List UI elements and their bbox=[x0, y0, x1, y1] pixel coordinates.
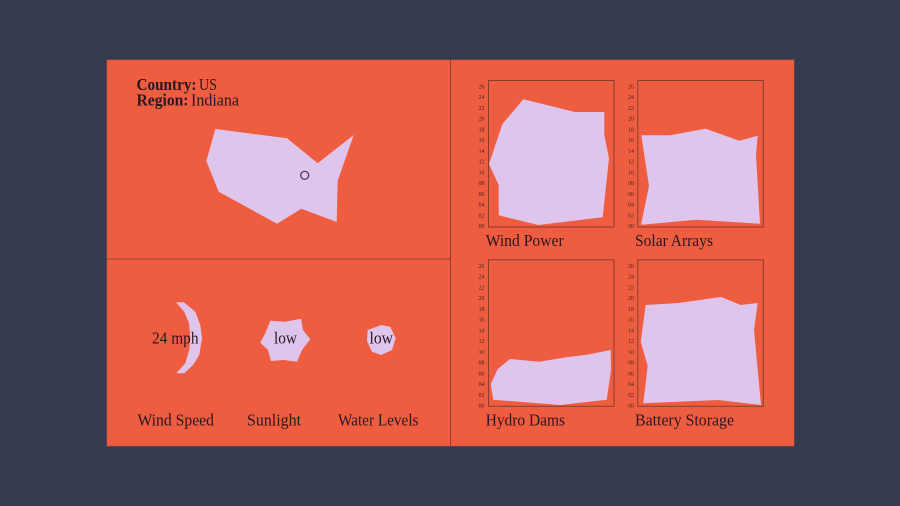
chart: battery storage: 02 bbox=[628, 393, 634, 399]
chart: battery storage: 24 bbox=[628, 274, 634, 280]
chart: solar arrays: 16 bbox=[628, 138, 634, 144]
chart: hydro dams: 22 bbox=[479, 285, 484, 291]
chart: solar arrays: 14 bbox=[628, 149, 634, 155]
metric: sunlight: Sunlight bbox=[247, 410, 301, 430]
chart: solar arrays bbox=[628, 80, 763, 250]
metric: water levels: low bbox=[370, 328, 394, 348]
chart: hydro dams: 26 bbox=[479, 264, 484, 270]
chart: wind power: 04 bbox=[479, 203, 484, 209]
chart: solar arrays: 12 bbox=[628, 160, 634, 166]
chart: wind power: 06 bbox=[479, 192, 484, 198]
chart: solar arrays: 20 bbox=[628, 117, 634, 123]
chart: hydro dams: 14 bbox=[479, 328, 484, 334]
chart: wind power: 14 bbox=[479, 149, 484, 155]
chart: battery storage: 26 bbox=[628, 264, 634, 270]
heading: country and region: US bbox=[199, 75, 217, 94]
chart: solar arrays: 06 bbox=[628, 192, 634, 198]
icon: location marker bbox=[301, 171, 309, 179]
chart: wind power: 02 bbox=[479, 214, 484, 220]
metric: wind speed: Wind Speed bbox=[138, 410, 214, 430]
chart: solar arrays: 10 bbox=[628, 170, 634, 176]
heading: country and region bbox=[136, 75, 239, 110]
chart: battery storage: 12 bbox=[628, 339, 634, 345]
chart: wind power: 22 bbox=[479, 106, 484, 112]
chart: solar arrays: 08 bbox=[628, 181, 634, 187]
metric: wind speed: 24 mph bbox=[152, 328, 199, 348]
chart: battery storage: 20 bbox=[628, 296, 634, 302]
chart: battery storage: Battery Storage bbox=[635, 410, 734, 430]
heading: country and region: Region: bbox=[136, 91, 188, 110]
chart: wind power: 18 bbox=[479, 128, 484, 134]
chart: hydro dams: 06 bbox=[479, 371, 484, 377]
chart: battery storage: 16 bbox=[628, 318, 634, 324]
chart: hydro dams: 20 bbox=[479, 296, 484, 302]
chart: solar arrays: 22 bbox=[628, 106, 634, 112]
chart: wind power: 10 bbox=[479, 170, 484, 176]
chart: battery storage: 06 bbox=[628, 371, 634, 377]
metric: wind speed bbox=[138, 302, 214, 430]
chart: solar arrays: 00 bbox=[628, 224, 634, 230]
chart: hydro dams: Hydro Dams bbox=[486, 410, 565, 430]
chart: wind power: 12 bbox=[479, 160, 484, 166]
chart: hydro dams: 10 bbox=[479, 350, 484, 356]
chart: battery storage: 04 bbox=[628, 382, 634, 388]
chart: wind power: 16 bbox=[479, 138, 484, 144]
chart: hydro dams: 18 bbox=[479, 307, 484, 313]
chart: wind power: 20 bbox=[479, 117, 484, 123]
chart: solar arrays: Solar Arrays bbox=[635, 231, 713, 250]
chart: solar arrays: 18 bbox=[628, 128, 634, 134]
metric: water levels: Water Levels bbox=[338, 410, 418, 430]
chart: wind power: 08 bbox=[479, 181, 484, 187]
chart: solar arrays: 02 bbox=[628, 214, 634, 220]
chart: solar arrays: 24 bbox=[628, 95, 634, 101]
chart: battery storage bbox=[628, 260, 763, 430]
panel: orange page bbox=[107, 60, 794, 446]
chart: hydro dams: 00 bbox=[479, 404, 484, 410]
chart: solar arrays: 04 bbox=[628, 203, 634, 209]
chart: hydro dams: 24 bbox=[479, 274, 484, 280]
chart: hydro dams: 16 bbox=[479, 318, 484, 324]
chart: battery storage: 22 bbox=[628, 285, 634, 291]
chart: wind power: Wind Power bbox=[486, 231, 564, 250]
chart: battery storage: 10 bbox=[628, 350, 634, 356]
chart: wind power: 26 bbox=[479, 84, 484, 90]
map: US outline with Indiana marker bbox=[206, 129, 354, 224]
chart: wind power bbox=[479, 80, 614, 250]
chart: battery storage: 18 bbox=[628, 307, 634, 313]
chart: hydro dams: 02 bbox=[479, 393, 484, 399]
metric: water levels bbox=[338, 325, 418, 430]
chart: wind power: 00 bbox=[479, 224, 484, 230]
chart: hydro dams: 12 bbox=[479, 339, 484, 345]
chart: hydro dams bbox=[479, 260, 614, 430]
chart: battery storage: 00 bbox=[628, 404, 634, 410]
metric: sunlight: low bbox=[274, 328, 298, 348]
chart: hydro dams: 04 bbox=[479, 382, 484, 388]
chart: battery storage: 08 bbox=[628, 360, 634, 366]
metric: sunlight bbox=[247, 319, 310, 430]
chart: wind power: 24 bbox=[479, 95, 484, 101]
chart: solar arrays: 26 bbox=[628, 84, 634, 90]
chart: battery storage: 14 bbox=[628, 328, 634, 334]
heading: country and region: Country: bbox=[136, 75, 196, 94]
heading: country and region: Indiana bbox=[191, 91, 239, 110]
chart: hydro dams: 08 bbox=[479, 360, 484, 366]
